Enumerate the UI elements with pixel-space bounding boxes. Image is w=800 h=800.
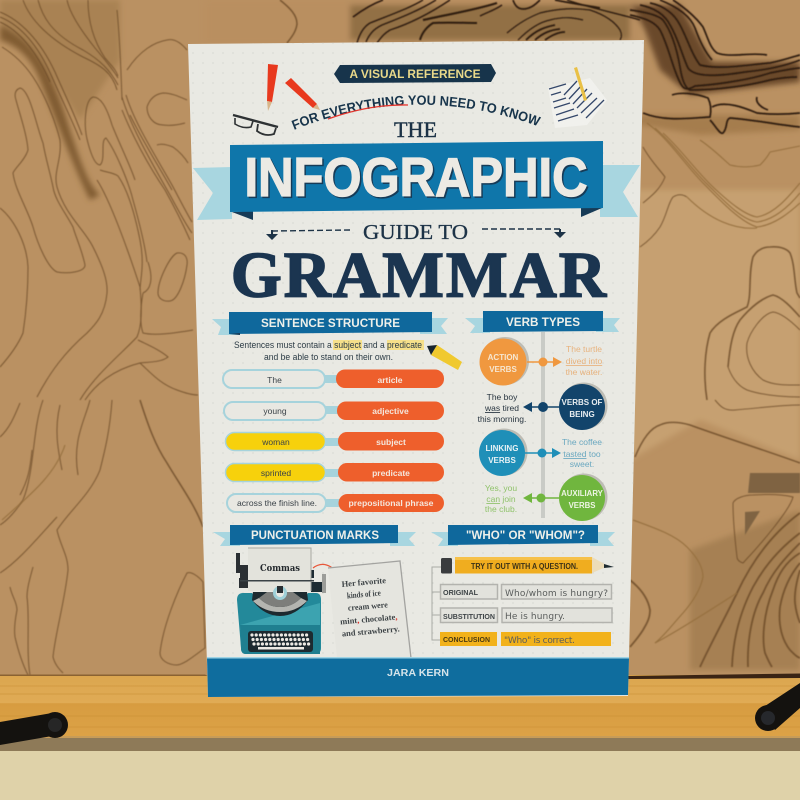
row: the / article xyxy=(223,370,444,388)
ribbon: left tail xyxy=(193,167,232,220)
typewriter paper xyxy=(248,548,311,591)
note: typed sentence sheet: mint, chocolate, xyxy=(340,612,398,626)
note: typed sentence sheet: cream were xyxy=(347,599,388,613)
item: linking verbs: LINKING xyxy=(486,444,518,453)
icon: notes with yellow pencil xyxy=(548,67,607,128)
row: across the finish line / prepositional phrase: across the finish line. xyxy=(237,498,317,508)
row: original xyxy=(440,584,612,599)
row: original: ORIGINAL xyxy=(443,590,479,597)
banner text: INFOGRAPHIC xyxy=(244,146,588,208)
ribbon folds xyxy=(232,208,602,220)
item: verbs of being: BEING xyxy=(569,410,595,419)
icon: highlighter xyxy=(427,345,462,370)
item: auxiliary verbs xyxy=(485,474,608,521)
typewriter right carriage xyxy=(311,570,326,593)
heading: who or whom: "WHO" OR "WHOM"? xyxy=(466,530,585,542)
row: substitution: SUBSTITUTION xyxy=(443,614,495,621)
title: the: THE xyxy=(394,117,437,142)
badge: a visual reference xyxy=(334,64,496,83)
pencil prompt xyxy=(441,557,614,574)
row: across the finish line / prepositional phrase xyxy=(227,494,444,512)
item: auxiliary verbs: the club. xyxy=(485,504,517,514)
banner: infographic xyxy=(193,141,640,220)
cover paper xyxy=(188,40,644,697)
curved tagline: FOR EVERYTHING YOU NEED TO KNOW xyxy=(292,95,542,130)
typewriter keyboard xyxy=(248,631,313,652)
title: grammar: GRAMMAR xyxy=(231,240,607,312)
note: typed sentence sheet: Her favorite xyxy=(341,575,387,589)
item: verbs of being: this morning. xyxy=(478,414,526,424)
heading: verb types: VERB TYPES xyxy=(506,315,580,329)
item: linking verbs: tasted too xyxy=(563,449,601,459)
item: action verbs xyxy=(480,337,602,386)
heading: punctuation marks xyxy=(213,525,416,546)
item: linking verbs: VERBS xyxy=(488,456,516,465)
item: linking verbs: The coffee xyxy=(562,437,602,447)
text: sentence rule: Sentences must contain a subject and a predicate xyxy=(234,340,422,350)
damage patches xyxy=(745,473,800,535)
row: conclusion xyxy=(440,632,611,646)
thick dark contour bundle top right xyxy=(353,0,800,133)
pencil prompt: TRY IT OUT WITH A QUESTION. xyxy=(471,562,578,571)
item: action verbs: ACTION xyxy=(488,353,519,362)
heading: sentence structure xyxy=(212,312,448,335)
item: verbs of being: VERBS OF xyxy=(562,398,603,407)
row: woman / subject: woman xyxy=(261,437,290,447)
banner band xyxy=(230,141,603,212)
typewriter body xyxy=(237,593,321,654)
item: action verbs: dived into xyxy=(566,356,602,366)
row: conclusion: "Who" is correct. xyxy=(504,636,575,646)
icon: typewriter xyxy=(236,548,326,654)
item: linking verbs xyxy=(479,428,602,476)
connector lines xyxy=(432,567,441,640)
badge: a visual reference: A VISUAL REFERENCE xyxy=(350,69,481,81)
arrow: curved red arrow xyxy=(313,564,341,575)
row: the / article: article xyxy=(377,375,403,385)
row: the / article: The xyxy=(267,375,282,385)
row: young / adjective: young xyxy=(263,406,287,416)
row: substitution: He is hungry. xyxy=(505,612,565,622)
book cover xyxy=(188,40,644,697)
item: auxiliary verbs: VERBS xyxy=(569,501,595,510)
item: linking verbs: sweet. xyxy=(570,459,594,469)
row: original: Who/whom is hungry? xyxy=(505,589,608,599)
item: action verbs: the water. xyxy=(566,367,602,377)
row: woman / subject: subject xyxy=(376,437,406,447)
item: action verbs: VERBS xyxy=(489,365,517,374)
row: young / adjective xyxy=(224,402,444,420)
row: sprinted / predicate xyxy=(226,463,444,482)
text: sentence rule: and be able to stand on their own. xyxy=(264,352,393,362)
note: typed sentence sheet: kinds of ice xyxy=(346,588,381,600)
row: sprinted / predicate: sprinted xyxy=(261,468,291,478)
heading: punctuation marks: PUNCTUATION MARKS xyxy=(251,530,379,542)
banner shadow text: INFOGRAPHIC xyxy=(246,148,589,210)
item: action verbs: The turtle xyxy=(566,344,602,354)
note: typed sentence sheet xyxy=(328,561,411,658)
row: across the finish line / prepositional phrase: prepositional phrase xyxy=(348,498,434,508)
row: young / adjective: adjective xyxy=(372,406,409,416)
row: sprinted / predicate: predicate xyxy=(372,468,410,478)
footer band with author: JARA KERN xyxy=(387,667,449,679)
item: verbs of being: The boy xyxy=(487,392,518,402)
typewriter lever xyxy=(236,553,248,588)
item: auxiliary verbs: Yes, you xyxy=(485,483,517,493)
paper label: Commas xyxy=(260,564,300,574)
row: woman / subject xyxy=(226,432,444,450)
item: verbs of being: was tired xyxy=(484,403,519,413)
heading: verb types xyxy=(465,311,620,333)
pale fan contour lines xyxy=(2,123,800,643)
row: conclusion: CONCLUSION xyxy=(443,637,490,644)
footer band with author xyxy=(207,657,629,697)
typewriter basket xyxy=(252,592,308,616)
note: typed sentence sheet: and strawberry. xyxy=(341,623,400,639)
heading: sentence structure: SENTENCE STRUCTURE xyxy=(261,316,400,330)
panel: sentence structure xyxy=(212,312,462,512)
item: verbs of being xyxy=(478,382,608,430)
icon: glasses xyxy=(233,115,278,135)
item: auxiliary verbs: can join xyxy=(486,494,516,504)
row: substitution xyxy=(440,608,612,622)
text: sentence rule xyxy=(234,340,424,362)
panel: punctuation marks xyxy=(213,525,416,658)
clip: right shelf bracket xyxy=(755,683,800,731)
clip: left shelf bracket xyxy=(0,712,68,745)
icon: red pencils xyxy=(267,64,320,111)
floor beneath shelf xyxy=(0,738,800,800)
item: auxiliary verbs: AUXILIARY xyxy=(561,489,604,498)
subtitle with dashed arrows: GUIDE TO xyxy=(363,220,468,244)
subtitle with dashed arrows xyxy=(266,220,566,244)
panel: verb types xyxy=(465,311,620,521)
typewriter bar xyxy=(240,580,314,582)
panel: who or whom xyxy=(431,525,615,646)
heading: who or whom xyxy=(431,525,615,546)
ribbon: right tail xyxy=(600,165,640,217)
wooden shelf xyxy=(0,674,800,738)
timeline spine xyxy=(541,332,545,518)
